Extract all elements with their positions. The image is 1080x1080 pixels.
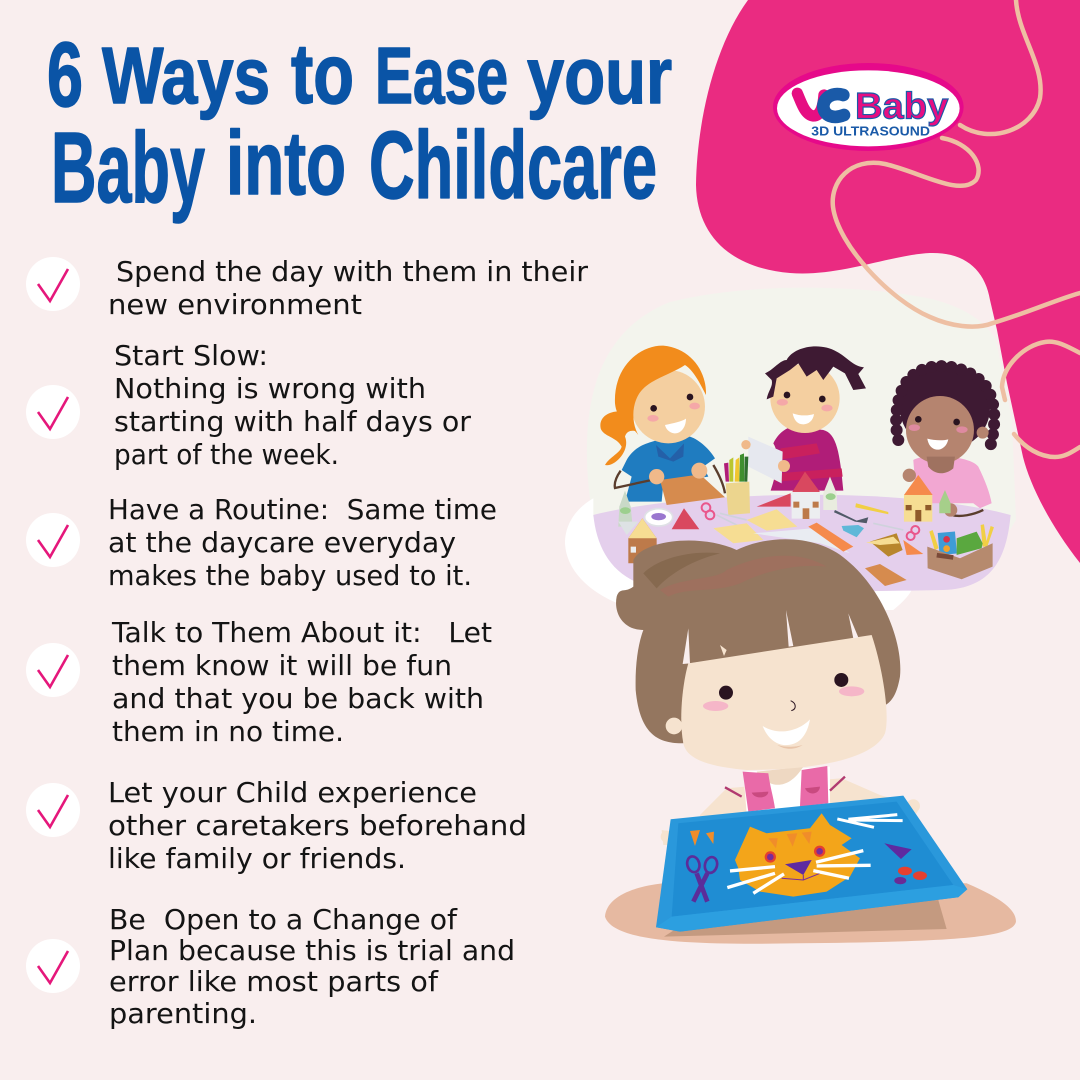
title: [47, 24, 672, 224]
smile: [763, 719, 810, 745]
arms and shirt: [662, 778, 920, 845]
craft items on table: [618, 453, 994, 586]
title: your: [527, 31, 672, 120]
tip 4 text: and that you be back with: [112, 682, 484, 715]
child: curly-haired girl: [896, 366, 994, 517]
tip 6 text: error like most parts of: [109, 965, 439, 998]
check icon 6: [26, 939, 80, 993]
tip 2 text: part of the week.: [114, 438, 339, 471]
check icon 5: [26, 783, 80, 837]
tip 4: [26, 616, 492, 748]
title: into: [226, 114, 346, 214]
tip 5 text: other caretakers beforehand: [108, 809, 527, 842]
table top: [593, 495, 1011, 591]
face: [681, 635, 887, 770]
eyes and cheeks: [719, 686, 733, 700]
title: to: [291, 27, 354, 121]
logo: UC Baby 3D Ultrasound: Baby: [855, 84, 949, 126]
check icon 3: [26, 513, 80, 567]
dungaree straps: [725, 766, 845, 812]
child: dark-haired boy: [741, 346, 866, 491]
tip 3 text: [108, 493, 497, 592]
tip 4 text: them know it will be fun: [112, 649, 452, 682]
child: red-haired girl: [600, 346, 725, 505]
pink corner blob: [696, 0, 1080, 563]
tip 6 text: Plan because this is trial and: [109, 934, 515, 967]
tip 1 text: new environment: [108, 288, 362, 321]
tip 3: [26, 493, 497, 592]
check icon 2: [26, 385, 80, 439]
title: 6: [47, 24, 83, 126]
orange triangles: [690, 830, 714, 846]
title: Baby: [51, 112, 205, 224]
tip 3 text: makes the baby used to it.: [108, 559, 472, 592]
tip 2 text: Start Slow:: [114, 339, 268, 372]
tip 1: [26, 255, 588, 321]
tip 4 text: [111, 616, 492, 748]
tip 4 text: them in no time.: [112, 715, 344, 748]
tip 6 text: Be Open to a Change of: [109, 903, 458, 936]
tip 2: [26, 339, 471, 471]
tip 5: [26, 776, 527, 875]
tip 3 text: Have a Routine: Same time: [108, 493, 497, 526]
tip 1 text: Spend the day with them in their: [116, 255, 588, 288]
tip 6 text: parenting.: [109, 997, 257, 1030]
tray: [656, 796, 967, 932]
tip 5 text: like family or friends.: [108, 842, 406, 875]
logo: UC Baby 3D Ultrasound: 3D ULTRASOUND: [811, 124, 930, 139]
tip 6 text: [109, 903, 515, 1030]
title: Ease: [375, 31, 508, 120]
fringe highlights: [683, 610, 858, 664]
illustration: girl holding tray with paper cat: [605, 539, 1016, 944]
check icon 4: [26, 643, 80, 697]
title: Childcare: [369, 112, 657, 219]
tip 3 text: at the daycare everyday: [108, 526, 456, 559]
paper cat: [727, 813, 871, 897]
pale backdrop blob: [587, 288, 1016, 530]
purple scissors: [685, 855, 719, 902]
white backdrop blob: [565, 498, 913, 610]
tip 1 text: [108, 255, 588, 321]
title: Ways: [102, 31, 270, 120]
illustration: children crafting at table: [565, 346, 1011, 610]
tip 5 text: [108, 776, 527, 875]
tip 6: [26, 903, 515, 1030]
pencil box: [927, 524, 994, 579]
tip 2 text: Nothing is wrong with: [114, 372, 426, 405]
table shadow: [605, 883, 1016, 944]
peach wavy lines: [833, 0, 1080, 457]
tip 2 text: starting with half days or: [114, 405, 471, 438]
tip 5 text: Let your Child experience: [108, 776, 477, 809]
spare paper sticks: [837, 815, 903, 827]
logo: UC Baby 3D Ultrasound: [773, 63, 964, 151]
purple triangle and red dots: [884, 843, 912, 859]
tip 2 text: [114, 339, 471, 471]
tip 4 text: Talk to Them About it: Let: [111, 616, 492, 649]
hair back and bun: [616, 539, 900, 743]
check icon 1: [26, 257, 80, 311]
